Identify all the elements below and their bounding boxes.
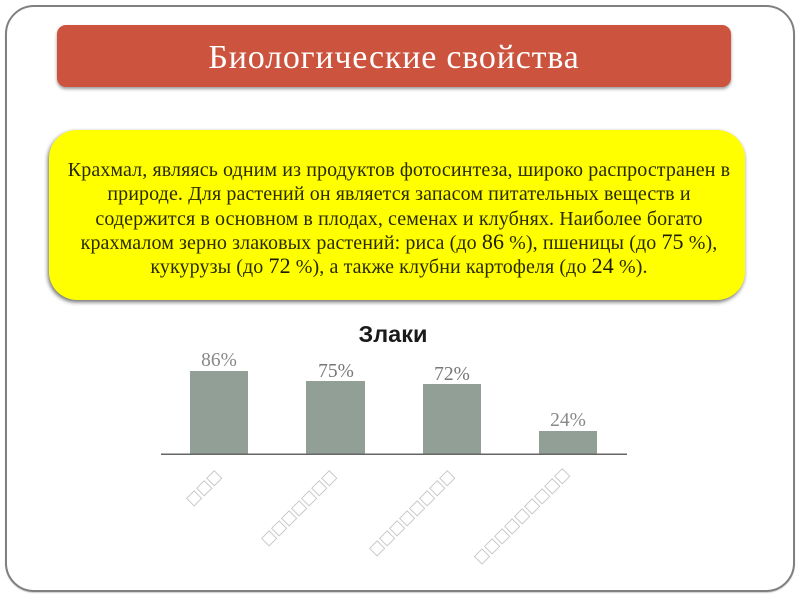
title banner	[57, 25, 731, 87]
callout: starch description	[49, 130, 745, 300]
category label 2: □□□□□□□	[257, 466, 340, 549]
callout text	[68, 159, 730, 278]
bar: 24%: 24%	[550, 410, 586, 431]
bar: 72%: 72%	[434, 364, 470, 385]
bar: 86%: 86%	[201, 350, 237, 371]
bar: 24%	[539, 410, 597, 454]
callout text: природе. Для растений он является запасом питательных веществ и	[107, 183, 691, 205]
axis line	[161, 454, 627, 455]
callout text: крахмалом зерно злаковых растений: риса (до 86 %), пшеницы (до 75 %),	[81, 229, 717, 254]
callout text: Крахмал, являясь одним из продуктов фотосинтеза, широко распространен в	[68, 159, 730, 181]
category label 1: □□□	[182, 466, 225, 509]
bar: 86%	[190, 350, 248, 454]
bar: 75%: 75%	[318, 361, 354, 382]
callout text: содержится в основном в плодах, семенах и клубнях. Наиболее богато	[95, 208, 703, 230]
callout text: кукурузы (до 72 %), а также клубни картофеля (до 24 %).	[150, 253, 648, 278]
category label 3: □□□□□□□□	[365, 466, 458, 559]
category label 4: □□□□□□□□□	[470, 464, 573, 567]
bar: 75%	[306, 361, 365, 454]
chart title: Злаки	[359, 321, 427, 347]
title banner: Биологические свойства	[208, 39, 580, 76]
bar: 72%	[423, 364, 481, 454]
